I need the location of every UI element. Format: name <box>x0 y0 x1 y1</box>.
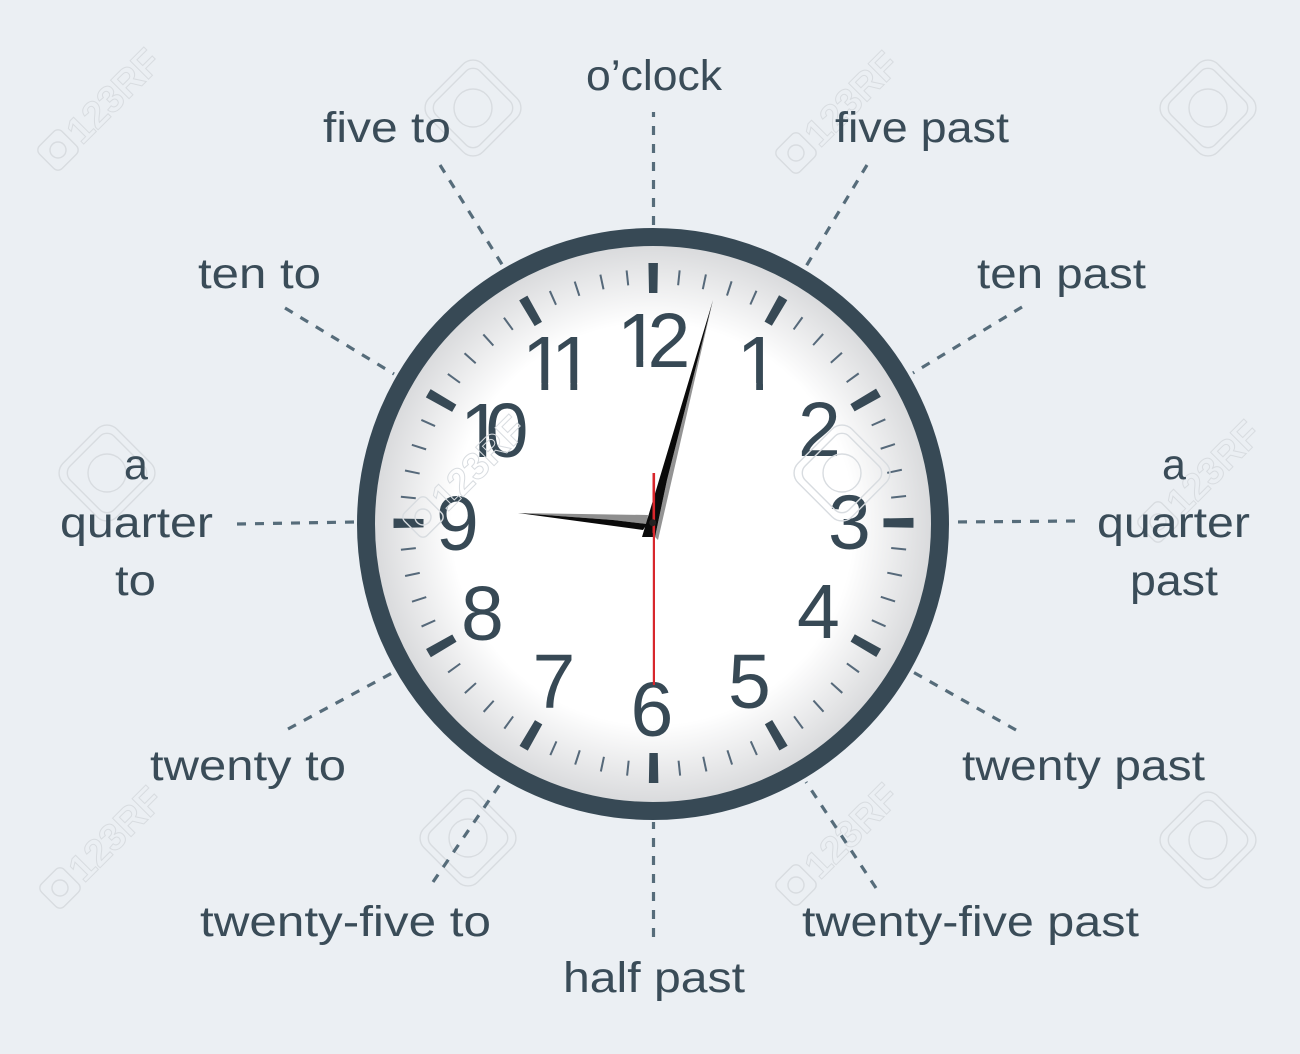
time phrase labels: past <box>1130 557 1218 605</box>
clock numerals: 9 <box>436 481 479 567</box>
time phrase labels: o’clock <box>586 52 723 100</box>
clock numerals: 1 <box>737 321 780 407</box>
clock numerals <box>436 298 871 753</box>
clock numerals: 5 <box>728 639 771 725</box>
clock numerals: 1 <box>617 298 660 384</box>
time phrase labels: quarter <box>1097 499 1250 547</box>
time phrase labels: quarter <box>60 499 213 547</box>
time phrase labels: half past <box>563 954 745 1002</box>
time phrase labels: to <box>115 557 156 605</box>
time phrase labels: twenty-five past <box>802 898 1139 946</box>
clock numerals: 7 <box>532 639 575 725</box>
watermarks over clock face <box>398 408 896 545</box>
time phrase labels: a <box>124 441 148 489</box>
clock numerals: 2 <box>648 298 690 384</box>
clock numerals: 2 <box>798 387 841 473</box>
minute hand <box>642 300 713 540</box>
time phrase labels: ten past <box>977 250 1146 298</box>
second hand <box>652 473 655 685</box>
hand pivot <box>649 519 656 526</box>
watermarks on background <box>33 41 1270 916</box>
clock face and rim <box>366 237 940 811</box>
time phrase labels: five past <box>835 104 1009 152</box>
clock numerals: 1 <box>551 321 594 407</box>
time phrase labels: ten to <box>198 250 321 298</box>
clock numerals: 4 <box>797 569 840 655</box>
clock numerals: 3 <box>828 480 871 566</box>
clock numerals: 8 <box>461 571 504 657</box>
hour hand <box>518 513 648 530</box>
time phrase labels: twenty past <box>962 742 1205 790</box>
time phrase labels: five to <box>323 104 451 152</box>
dashed connector lines <box>237 112 1075 937</box>
time phrase labels: a <box>1162 441 1186 489</box>
major hour ticks <box>408 278 898 768</box>
clock numerals: 1 <box>522 321 565 407</box>
clock numerals: 6 <box>630 667 673 753</box>
clock numerals: 1 <box>460 388 503 474</box>
clock numerals: 0 <box>486 388 528 474</box>
clock <box>366 237 940 811</box>
time phrase labels: twenty to <box>150 742 346 790</box>
minor tick marks <box>407 276 900 770</box>
time phrase labels: twenty-five to <box>200 898 491 946</box>
